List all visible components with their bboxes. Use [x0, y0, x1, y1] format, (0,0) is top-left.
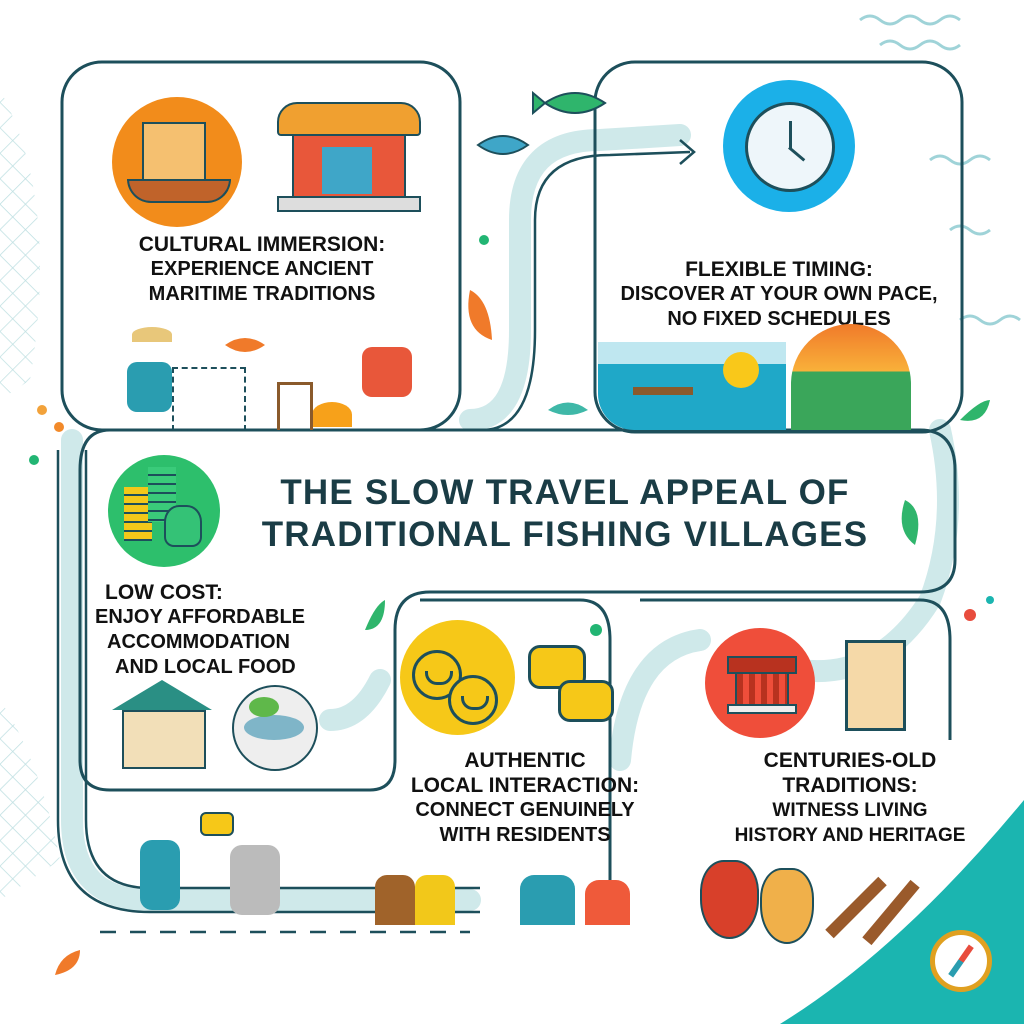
title: TRADITIONAL FISHING VILLAGES	[262, 515, 868, 554]
icon: red temple	[705, 628, 815, 738]
text: low cost	[95, 581, 305, 678]
text: flexible timing: DISCOVER AT YOUR OWN PACE,	[620, 283, 938, 305]
text: flexible timing	[620, 258, 938, 330]
illustration: house and plate	[112, 680, 318, 771]
text: authentic local interaction: WITH RESIDENTS	[439, 824, 611, 846]
waves top-right	[860, 16, 1020, 324]
illustration: masks and oars	[700, 860, 920, 946]
icon: junk boat	[112, 97, 242, 227]
illustration: villagers	[140, 812, 630, 925]
text: cultural immersion: EXPERIENCE ANCIENT	[151, 258, 373, 280]
text: low cost: AND LOCAL FOOD	[115, 656, 296, 678]
icon: coins	[108, 455, 220, 567]
panel: cultural immersion	[112, 97, 421, 430]
illustration: fisherman and cook	[127, 327, 412, 430]
dots & leaves	[37, 405, 47, 415]
text: cultural immersion: MARITIME TRADITIONS	[149, 283, 375, 305]
text: authentic local interaction: CONNECT GENUINELY	[415, 799, 635, 821]
panel outlines	[62, 62, 962, 880]
illustration: reading by sea	[598, 342, 786, 430]
text: centuries-old traditions: TRADITIONS:	[782, 774, 918, 797]
title	[262, 473, 868, 554]
text: cultural immersion	[139, 233, 385, 305]
icon: compass	[930, 930, 992, 992]
text: centuries-old traditions: HISTORY AND HERITAGE	[735, 825, 965, 846]
icon: smiley faces	[400, 620, 515, 735]
text: centuries-old traditions: CENTURIES-OLD	[764, 749, 936, 772]
icon: clock	[723, 80, 855, 212]
illustration: sunset walk	[791, 324, 911, 430]
icon: speech bubbles	[528, 645, 614, 722]
icon: temple	[277, 102, 421, 212]
text: flexible timing: NO FIXED SCHEDULES	[667, 308, 891, 330]
text: authentic local interaction: LOCAL INTERACTION:	[411, 774, 639, 797]
fish	[533, 93, 605, 113]
panel: flexible timing	[598, 80, 938, 430]
text: low cost: ENJOY AFFORDABLE	[95, 606, 305, 628]
text: authentic local interaction	[411, 749, 639, 846]
title: THE SLOW TRAVEL APPEAL OF	[280, 473, 850, 512]
net bottom-left	[0, 700, 60, 900]
light road paths	[72, 135, 948, 900]
text: cultural immersion: CULTURAL IMMERSION:	[139, 233, 385, 256]
text: low cost: LOW COST:	[105, 581, 223, 604]
text: centuries-old traditions	[735, 749, 965, 846]
text: low cost: ACCOMMODATION	[107, 631, 290, 653]
text: flexible timing: FLEXIBLE TIMING:	[685, 258, 873, 281]
text: centuries-old traditions: WITNESS LIVING	[772, 800, 928, 821]
teal corner	[780, 800, 1024, 1024]
icon: scroll	[845, 640, 906, 731]
text: authentic local interaction: AUTHENTIC	[464, 749, 586, 772]
net top-left	[0, 90, 40, 400]
